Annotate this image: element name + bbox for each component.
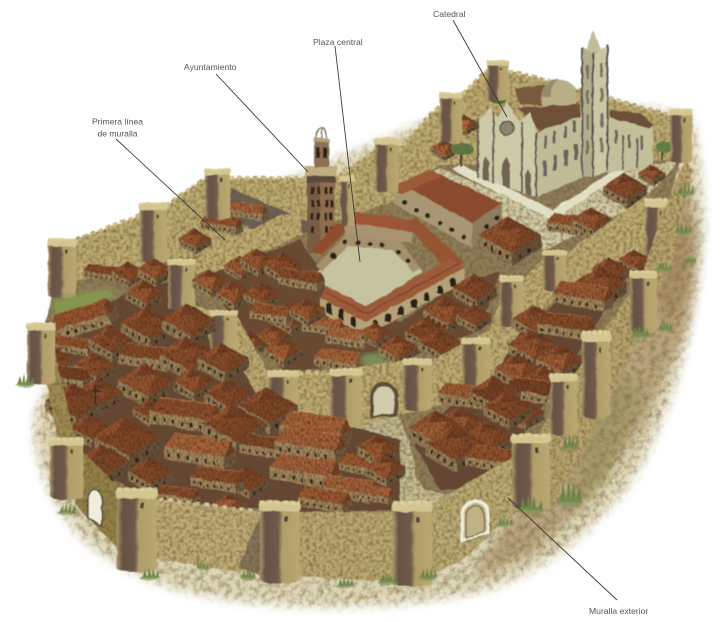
west wall face bbox=[37, 330, 76, 442]
grass patch beyond the plaza bbox=[359, 353, 387, 367]
cathedral bbox=[450, 30, 672, 220]
portals bbox=[483, 156, 531, 195]
grass at the foot of the back-left wall bbox=[54, 288, 114, 330]
tree east of cathedral bbox=[656, 141, 672, 160]
rose window bbox=[500, 121, 514, 135]
cupola bbox=[316, 128, 327, 138]
plaza back buildings bbox=[345, 211, 412, 232]
label: Catedral: Catedral bbox=[433, 9, 466, 19]
shadow on back wall bbox=[215, 183, 308, 250]
inner wall faces bbox=[195, 195, 660, 425]
south-east wall face bbox=[425, 452, 525, 578]
cathedral main roof bbox=[518, 104, 580, 131]
tree behind the facade bbox=[489, 94, 507, 104]
olive vegetation by the inner wall bbox=[240, 345, 270, 400]
outer wall towers bbox=[26, 271, 658, 587]
back wall towers bbox=[47, 61, 693, 299]
tower windows bbox=[311, 187, 333, 233]
cathedral north nave and dome bbox=[515, 85, 580, 105]
first-line tower bbox=[167, 259, 196, 310]
front wall: central section bbox=[295, 512, 395, 582]
cathedral bell tower bbox=[582, 47, 593, 178]
cathedral east wing bbox=[608, 117, 653, 172]
label: Primera línea de muralla: de muralla bbox=[97, 128, 138, 138]
leader line: Muralla exterior bbox=[508, 498, 617, 600]
tree west of cathedral bbox=[450, 143, 474, 167]
cathedral platform bbox=[452, 164, 625, 220]
inner wall: north-west section bbox=[190, 215, 302, 280]
wall shadow: left section bbox=[238, 512, 262, 576]
plaza outer arcade bbox=[320, 268, 464, 336]
plaza inner arcade bbox=[316, 232, 420, 272]
street by the gate bbox=[345, 405, 420, 505]
south-east gate bbox=[462, 501, 488, 540]
plaza floor bbox=[318, 242, 422, 307]
cathedral facade bbox=[478, 102, 537, 197]
city floor bbox=[40, 160, 680, 535]
central gate bbox=[370, 382, 398, 418]
label: Primera línea de muralla: Primera línea bbox=[92, 116, 143, 126]
leader line: Plaza central bbox=[335, 46, 360, 262]
east wall face bbox=[530, 160, 692, 510]
roof mass: east quarter bbox=[415, 265, 632, 490]
houses: central quarter bbox=[192, 248, 498, 373]
town hall tower bbox=[305, 128, 337, 253]
label: Plaza central: Plaza central bbox=[313, 37, 363, 47]
church cross bbox=[91, 385, 101, 405]
leader line: Primera línea de muralla bbox=[116, 139, 225, 240]
roof mass: south-west quarter bbox=[40, 282, 400, 512]
houses: south-west quarter bbox=[30, 289, 406, 518]
inner wall tops bbox=[298, 370, 330, 374]
label: Muralla exterior: Muralla exterior bbox=[589, 606, 648, 616]
south-west wall face bbox=[75, 445, 122, 552]
leader line: Ayuntamiento bbox=[216, 74, 308, 172]
leader line: Catedral bbox=[453, 20, 507, 117]
inner wall towers bbox=[209, 199, 670, 427]
cathedral facade buttresses bbox=[477, 112, 537, 197]
back wall bbox=[76, 70, 670, 290]
ground: terrain around the walls bbox=[35, 90, 703, 606]
plaza central bbox=[312, 211, 464, 336]
label: Ayuntamiento: Ayuntamiento bbox=[184, 62, 237, 72]
front wall: left section bbox=[150, 498, 265, 576]
plaza front wings roof bbox=[320, 258, 464, 322]
plaza right wing roof bbox=[404, 218, 464, 275]
roof mass: central quarter bbox=[205, 240, 500, 372]
street before the south-east wall bbox=[395, 450, 470, 510]
grass tufts bbox=[15, 183, 697, 588]
large hall north-east of the plaza bbox=[390, 170, 502, 248]
houses: north-west quarter row bbox=[84, 258, 173, 311]
tower shaft bbox=[307, 175, 335, 253]
crenellations of back wall bbox=[76, 70, 670, 240]
houses behind the inner wall, north-west bbox=[178, 115, 478, 255]
cathedral square pavement bbox=[420, 160, 680, 250]
south-west gate bbox=[88, 490, 102, 526]
cathedral side wall bbox=[537, 112, 582, 197]
belfry bbox=[314, 140, 329, 167]
inner wall bbox=[195, 195, 660, 425]
green patch inside the wall bbox=[54, 290, 112, 328]
front wall crenellations bbox=[150, 498, 265, 512]
houses: east of the hall bbox=[478, 165, 666, 266]
houses: east quarter bbox=[408, 249, 652, 474]
